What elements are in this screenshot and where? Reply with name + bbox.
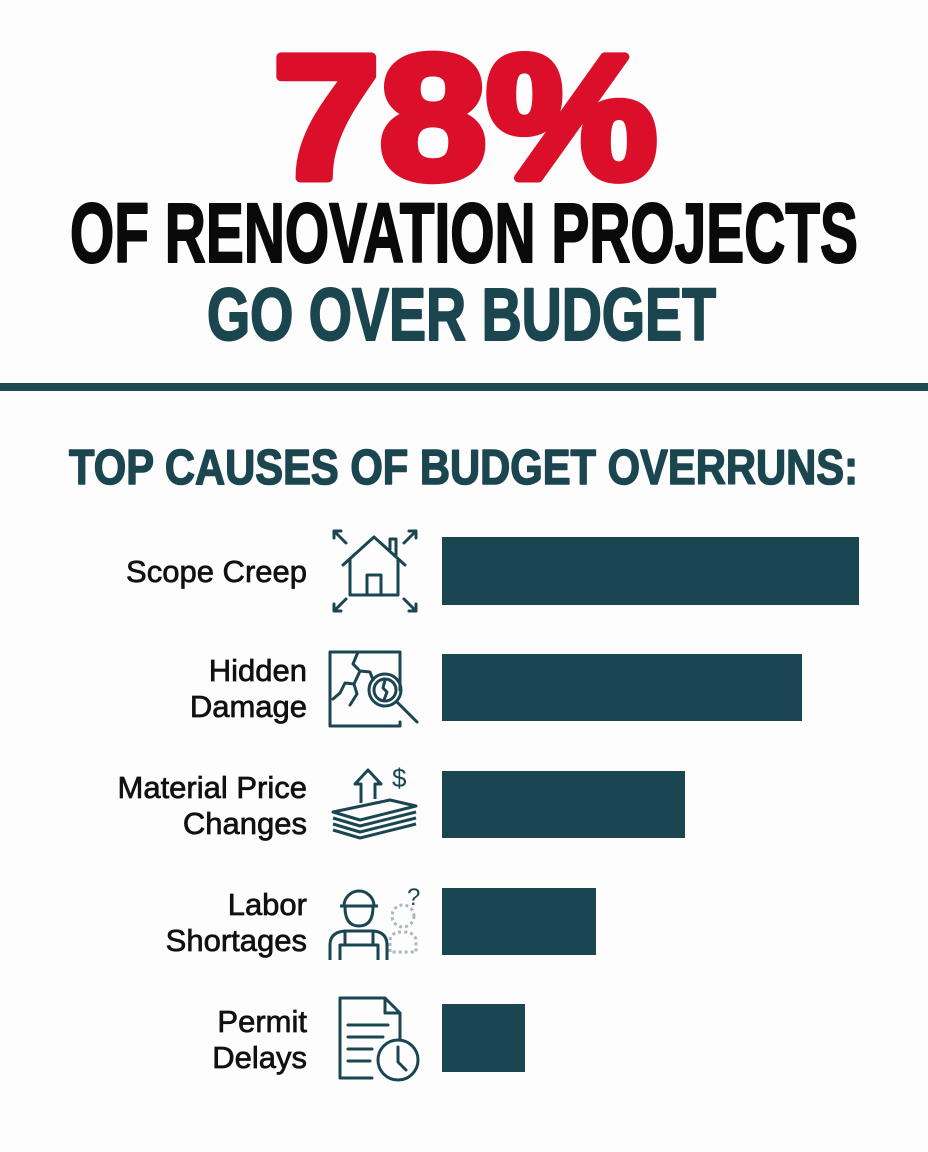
labels: Scope Creep — [126, 554, 307, 589]
labels — [118, 554, 307, 1075]
icon: hidden damage — [330, 652, 417, 726]
labels: Material Price — [118, 770, 307, 805]
title: 78%: 78% — [273, 20, 657, 216]
labels: Permit — [217, 1004, 307, 1039]
icon: material price — [333, 763, 416, 838]
bar chart — [118, 537, 859, 1075]
subtitle line 2: GO OVER BUDGET — [207, 273, 716, 356]
labels: Shortages — [166, 923, 307, 958]
labels: Delays — [212, 1040, 307, 1075]
icon: labor shortage — [330, 884, 420, 960]
labels: Labor — [228, 887, 307, 922]
labels: Changes — [183, 806, 307, 841]
icon: labor shortage: ? — [407, 884, 420, 911]
icon: material price: $ — [392, 763, 407, 793]
labels: Damage — [190, 689, 307, 724]
icon: house expand — [334, 531, 416, 611]
bars — [442, 537, 859, 1072]
labels: Hidden — [209, 653, 307, 688]
icon: permit document clock — [340, 998, 418, 1080]
